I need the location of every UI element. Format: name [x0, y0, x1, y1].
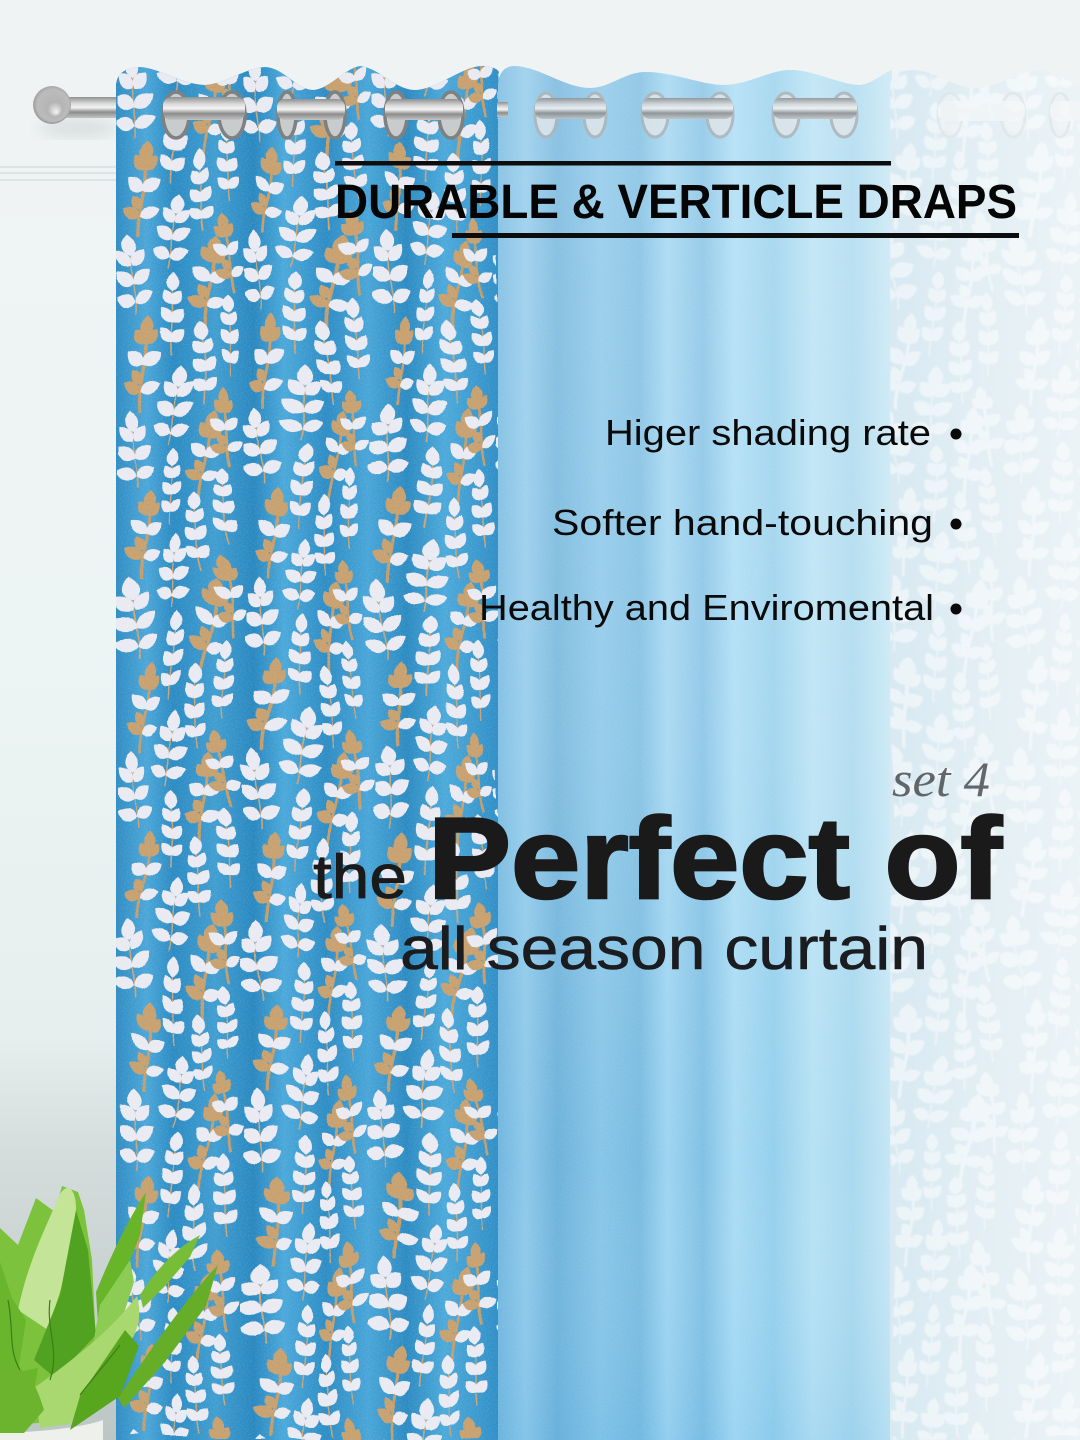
plant pot [0, 1420, 103, 1440]
grommet rings on faded curtain [938, 93, 1080, 137]
grommet rings on patterned curtain [163, 92, 508, 138]
headline: the Perfect of: Perfect of [428, 795, 1003, 923]
panel: plain light blue curtain [498, 60, 892, 1440]
panel: faded patterned curtain [890, 60, 1080, 1440]
plant leaves [0, 1186, 218, 1433]
feature: shading rate: Higer shading rate [605, 412, 931, 453]
subheading: all season curtain: all season curtain [400, 915, 928, 982]
wall moulding [0, 167, 116, 180]
panel: patterned blue curtain [116, 60, 500, 1440]
title: durable and verticle draps: DURABLE & VERTICLE DRAPS [335, 176, 1017, 229]
headline: the Perfect of: the [313, 843, 407, 912]
title: durable and verticle draps [335, 161, 1019, 238]
feature list [479, 412, 962, 628]
feature: healthy and enviromental: Healthy and Enviromental [479, 587, 934, 628]
feature: hand touching: Softer hand-touching [552, 502, 933, 543]
grommet rings on plain curtain [535, 93, 857, 137]
curtain rod end with finial [33, 86, 120, 138]
script label: set 4: set 4 [892, 751, 990, 807]
potted plant [0, 1186, 218, 1440]
